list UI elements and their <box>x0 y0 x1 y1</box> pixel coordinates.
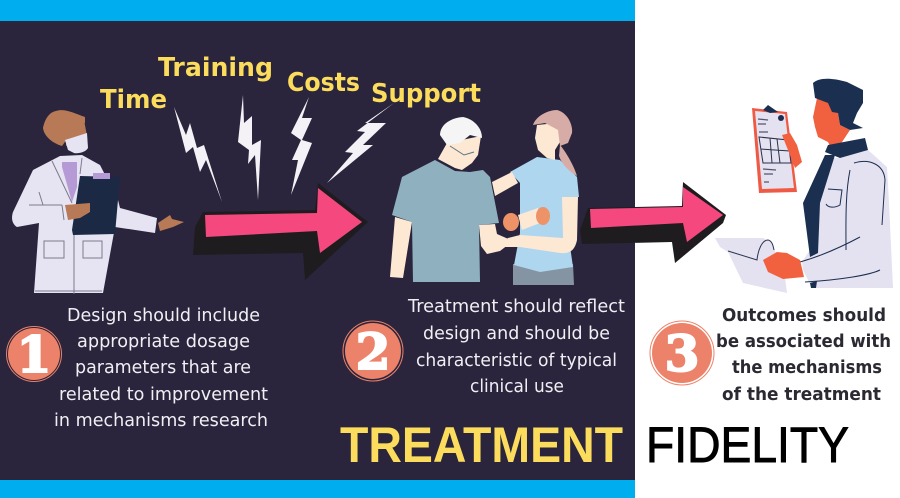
badge ring <box>650 321 714 385</box>
dumbbell left weight <box>503 213 519 231</box>
coat <box>798 150 893 288</box>
clipboard lines <box>758 119 776 182</box>
neck and face <box>813 98 850 152</box>
bolt: training <box>238 95 261 200</box>
paper <box>715 238 787 293</box>
text block: design: in mechanisms research <box>54 410 268 431</box>
patient glasses <box>450 146 474 155</box>
arrow 1 <box>193 183 368 280</box>
text block: treatment <box>407 296 625 397</box>
clipboard sheet <box>755 111 794 189</box>
badge 2 <box>343 321 403 381</box>
label: Support: Support <box>371 79 481 109</box>
badge number: 1 <box>17 325 51 384</box>
clipboard frame <box>752 108 797 193</box>
badge number: 2 <box>356 322 390 381</box>
barrier labels <box>100 53 481 115</box>
therapist head <box>535 123 563 160</box>
label: Training: Training <box>158 53 273 83</box>
mask <box>65 133 88 153</box>
text block: design: appropriate dosage <box>77 331 250 352</box>
patient left arm <box>390 217 412 278</box>
hand on paper <box>763 252 804 279</box>
therapist pants <box>513 264 574 285</box>
text block: outcomes <box>716 305 891 405</box>
text block: treatment: design and should be <box>423 323 610 344</box>
therapist ponytail <box>559 145 577 176</box>
text block: design: Design should include <box>67 305 260 326</box>
bolt: costs <box>291 97 312 195</box>
holding hand <box>65 203 90 220</box>
bolt: time <box>174 107 222 202</box>
clipboard clip <box>93 173 110 179</box>
arrow shadow <box>193 183 368 280</box>
therapist arm <box>497 197 578 253</box>
therapist support arm <box>492 172 518 196</box>
text block: outcomes: of the treatment <box>722 384 881 405</box>
open hand <box>158 215 184 231</box>
title: TREATMENT <box>340 417 623 473</box>
badge circle <box>652 323 712 383</box>
text block: treatment: Treatment should reflect <box>407 296 625 317</box>
hand on clipboard <box>782 133 802 168</box>
arrow shadow <box>580 182 726 263</box>
text block: design: related to improvement <box>59 384 268 405</box>
arrow body <box>590 187 723 242</box>
illustration: doctor with clipboard <box>12 110 184 294</box>
bolt: support <box>327 103 394 183</box>
title: FIDELITY <box>646 417 849 473</box>
label: Costs: Costs <box>287 68 360 98</box>
dark background panel <box>0 21 635 480</box>
therapist shirt <box>510 157 579 272</box>
dumbbell handle <box>518 208 540 230</box>
illustration: clinician reading results <box>715 79 893 293</box>
top blue band <box>0 0 635 21</box>
lower tie <box>810 281 817 288</box>
badge ring <box>6 326 62 382</box>
patient shirt <box>392 160 499 282</box>
label: Time: Time <box>100 85 167 115</box>
hair <box>813 79 863 130</box>
bottom blue band <box>0 480 635 498</box>
badge circle <box>345 323 401 379</box>
sweater <box>62 162 77 202</box>
clipboard <box>72 176 120 235</box>
title <box>340 417 849 473</box>
text block: treatment: characteristic of typical <box>416 350 617 371</box>
badge 1 <box>6 325 62 384</box>
therapist hair <box>533 110 572 146</box>
text block: treatment: clinical use <box>470 376 564 397</box>
text block: outcomes: Outcomes should <box>722 305 886 326</box>
shirt and tie <box>803 155 835 257</box>
coat seams <box>800 161 885 282</box>
clipboard clip <box>763 105 778 113</box>
face <box>66 120 87 146</box>
dumbbell right weight <box>536 207 550 225</box>
paper fold <box>728 240 774 260</box>
lightning bolts <box>174 95 394 202</box>
patient hair <box>440 117 482 145</box>
clipboard dot <box>778 115 784 121</box>
hair <box>43 110 85 146</box>
text block: design <box>54 305 268 431</box>
badge circle <box>8 328 60 380</box>
arrow 2 <box>580 182 726 263</box>
arrow body <box>205 188 362 253</box>
badge 3 <box>650 321 714 385</box>
patient head <box>438 136 481 170</box>
text block: outcomes: the mechanisms <box>732 357 882 378</box>
badge number: 3 <box>665 324 699 383</box>
clipboard table <box>759 137 791 163</box>
text block: design: parameters that are <box>75 357 251 378</box>
patient forearm <box>479 224 513 254</box>
badge ring <box>343 321 403 381</box>
illustration: patient and therapist with dumbbell <box>390 110 579 285</box>
collar <box>825 138 868 158</box>
coat <box>12 155 157 293</box>
coat details <box>29 158 102 294</box>
